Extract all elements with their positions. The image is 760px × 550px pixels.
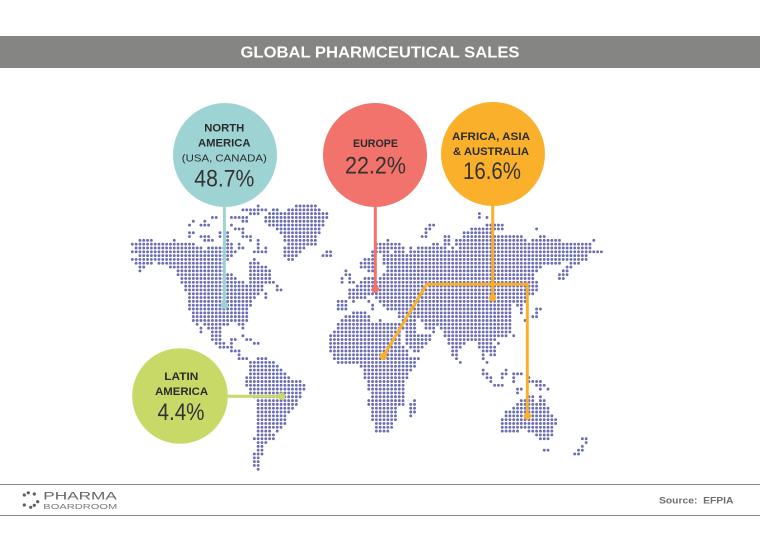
callout: Latin America (132, 348, 285, 444)
callout: North America: NORTH (204, 123, 244, 135)
callout: Africa, Asia and Australia (380, 102, 545, 420)
dotted world map (132, 206, 601, 469)
footer rules (0, 484, 760, 516)
callout: Latin America: AMERICA (155, 386, 208, 398)
callout: Europe (323, 103, 427, 293)
logo: Pharma Boardroom: BOARDROOM (43, 504, 118, 511)
callout: Africa, Asia and Australia: & AUSTRALIA (453, 146, 529, 158)
title banner (0, 36, 760, 68)
callout: Europe: 22.2% (345, 152, 406, 180)
callout: North America (173, 103, 277, 309)
callout: Europe: EUROPE (353, 138, 398, 150)
callout: North America: AMERICA (198, 138, 251, 150)
callout: North America: (USA, CANADA) (182, 153, 267, 165)
logo: Pharma Boardroom: PHARMA (43, 490, 118, 502)
callout: North America: 48.7% (194, 166, 254, 193)
logo: Pharma Boardroom (23, 490, 118, 511)
title banner: GLOBAL PHARMCEUTICAL SALES (240, 44, 520, 62)
callout: Latin America: 4.4% (158, 399, 204, 426)
callout: Latin America: LATIN (164, 371, 198, 383)
callout: Africa, Asia and Australia: AFRICA, ASIA (452, 131, 530, 143)
callout: Africa, Asia and Australia: 16.6% (463, 158, 521, 185)
source note: Source: EFPIA (659, 496, 734, 506)
icon: logo dots (23, 491, 39, 509)
